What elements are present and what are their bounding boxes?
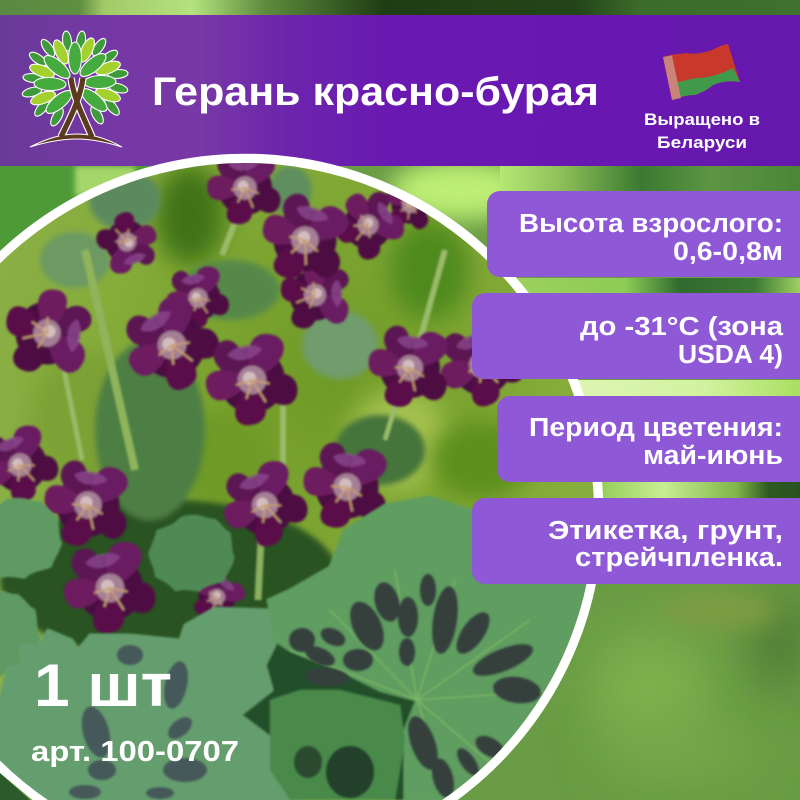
header band [0, 15, 800, 166]
logo: tree [21, 30, 129, 147]
icon: Belarus flag [663, 44, 740, 100]
made in Belarus label: Выращено в [644, 110, 760, 129]
panel: package contents [472, 498, 800, 584]
product photo circle: geranium [0, 150, 603, 800]
panel: hardiness: USDA 4) [678, 341, 783, 369]
article number: арт. 100-0707 [31, 736, 239, 768]
panel: height: 0,6-0,8м [673, 238, 783, 266]
panel: flowering: май-июнь [643, 442, 783, 470]
panel: height [487, 191, 800, 277]
panel: height: Высота взрослого: [519, 210, 783, 238]
panel: hardiness [472, 293, 800, 379]
panel: flowering: Период цветения: [529, 414, 783, 442]
panel: package contents: стрейчпленка. [575, 544, 783, 572]
quantity: 1 шт [34, 652, 172, 719]
made in Belarus label [644, 110, 760, 152]
made in Belarus label: Беларуси [657, 133, 747, 152]
panel: flowering [497, 396, 800, 482]
panel: hardiness: до -31°C (зона [580, 313, 784, 341]
panel: package contents: Этикетка, грунт, [548, 517, 783, 545]
title: Герань красно-бурая [152, 70, 599, 114]
